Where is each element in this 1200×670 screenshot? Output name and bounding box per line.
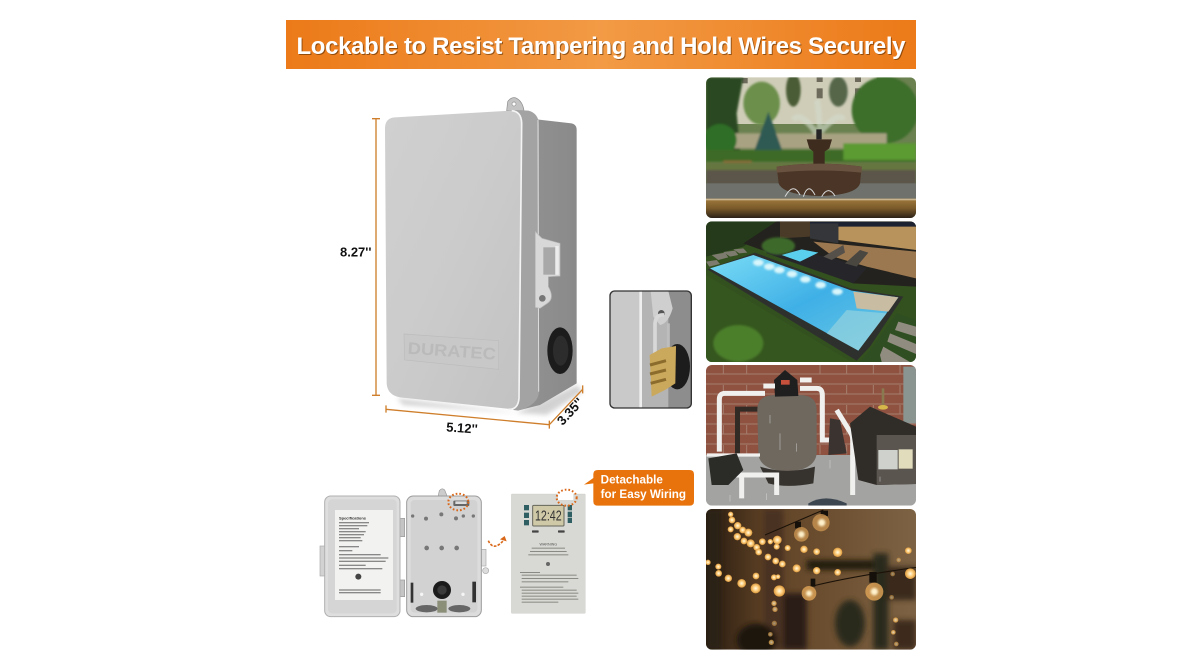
box front door: [385, 111, 521, 409]
product enclosure with dimensions: [340, 98, 692, 437]
control panel plate: WARNING: [540, 542, 557, 546]
title banner: [286, 20, 916, 69]
product enclosure with dimensions: 3.35'': [554, 395, 586, 428]
photo: pool pump and heater equipment: [706, 365, 917, 506]
icon: hanging tab: [507, 98, 524, 111]
callout: detachable: [584, 470, 694, 506]
lock inset photo: [610, 291, 692, 408]
lock hasp: [535, 232, 560, 308]
open door: [320, 496, 405, 617]
photo: illuminated swimming pool: [706, 221, 916, 365]
arrow: detach direction: [488, 536, 507, 546]
product enclosure with dimensions: 5.12'': [446, 419, 478, 437]
callout: detachable: Detachable: [601, 473, 663, 486]
ground shadow: [397, 385, 583, 415]
box back side: [520, 119, 577, 410]
title banner: Lockable to Resist Tampering and Hold Wires Securely: [296, 33, 906, 60]
control panel plate: [511, 490, 585, 613]
dimension labels: 8.27'': [340, 244, 371, 259]
large bulbs: [794, 511, 883, 601]
open door: Specifications: [339, 515, 367, 520]
embossed brand label: [404, 334, 499, 369]
box side band: [513, 110, 539, 411]
photo: garden fountain: [703, 73, 918, 218]
callout: detachable: for Easy Wiring: [601, 488, 686, 501]
open enclosure, label and control panel: [320, 470, 694, 617]
orange highlight circles: [448, 490, 577, 510]
title banner: Lockable to Resist Tampering and Hold Wires Securely: [298, 34, 907, 61]
open box interior: [407, 489, 489, 617]
embossed brand label: DURATEC: [407, 339, 497, 364]
photo: string lights on patio: [705, 509, 916, 657]
dimension lines: [372, 119, 583, 429]
icon: cable grommet: [547, 327, 573, 374]
control panel plate: 12:42: [535, 509, 562, 525]
